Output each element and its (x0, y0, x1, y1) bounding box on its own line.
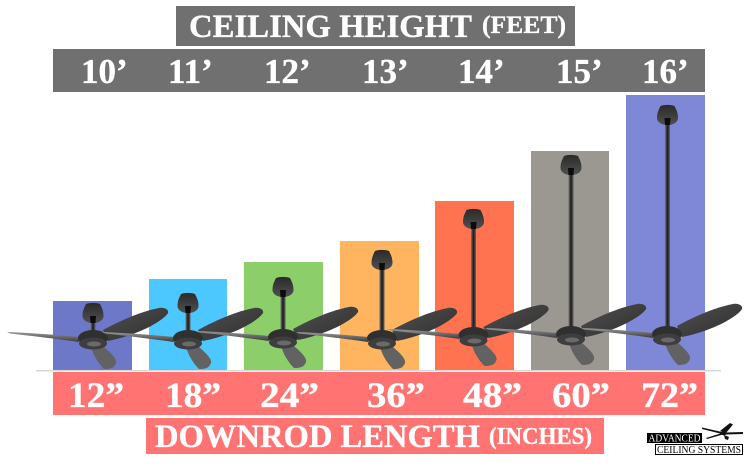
downrod length values row: 18” (165, 375, 221, 415)
icon: logo fan (702, 423, 743, 440)
fan 7 (581, 105, 742, 365)
title: downrod length (146, 418, 604, 455)
ceiling height values row: 15’ (556, 52, 603, 91)
fan 2 (102, 293, 263, 369)
downrod length values row: 48” (463, 375, 522, 415)
ceiling height values row: 11’ (168, 52, 213, 91)
fan 6 (485, 155, 646, 365)
bar 15 ft (531, 151, 609, 370)
bar 16 ft (626, 95, 705, 370)
fan 4 (296, 250, 457, 369)
downrod length values row: 36” (367, 375, 425, 415)
ceiling height values row (53, 49, 705, 92)
fan 3 (197, 277, 358, 368)
bar 10 ft (53, 301, 132, 370)
logo: advanced ceiling systems: ADVANCED (648, 434, 701, 444)
downrod length values row: 12” (68, 375, 124, 415)
bar 12 ft (244, 262, 323, 370)
title: ceiling height: CEILING HEIGHT (189, 9, 472, 45)
bar chart: fan heights (36, 95, 721, 372)
ceiling height values row: 16’ (642, 52, 689, 91)
title: ceiling height (176, 6, 575, 46)
ceiling height values row: 13’ (362, 52, 409, 91)
bar 13 ft (340, 241, 419, 370)
ceiling height values row: 12’ (264, 52, 311, 91)
bar 11 ft (149, 279, 227, 370)
title: ceiling height: (FEET) (482, 12, 566, 39)
ceiling height values row: 10’ (81, 52, 128, 91)
fan 5 (388, 209, 549, 366)
downrod length values row: 24” (260, 375, 319, 415)
title: downrod length: (INCHES) (489, 424, 592, 450)
fan 1 (7, 303, 168, 369)
bar 14 ft (435, 201, 514, 370)
title: downrod length: DOWNROD LENGTH (155, 419, 480, 455)
logo: advanced ceiling systems (647, 423, 743, 456)
downrod length values row (53, 372, 705, 415)
logo: advanced ceiling systems: CEILING SYSTEMS (657, 445, 741, 456)
downrod length values row: 72” (641, 375, 698, 415)
ceiling height values row: 14’ (458, 52, 505, 91)
downrod length values row: 60” (552, 375, 610, 415)
